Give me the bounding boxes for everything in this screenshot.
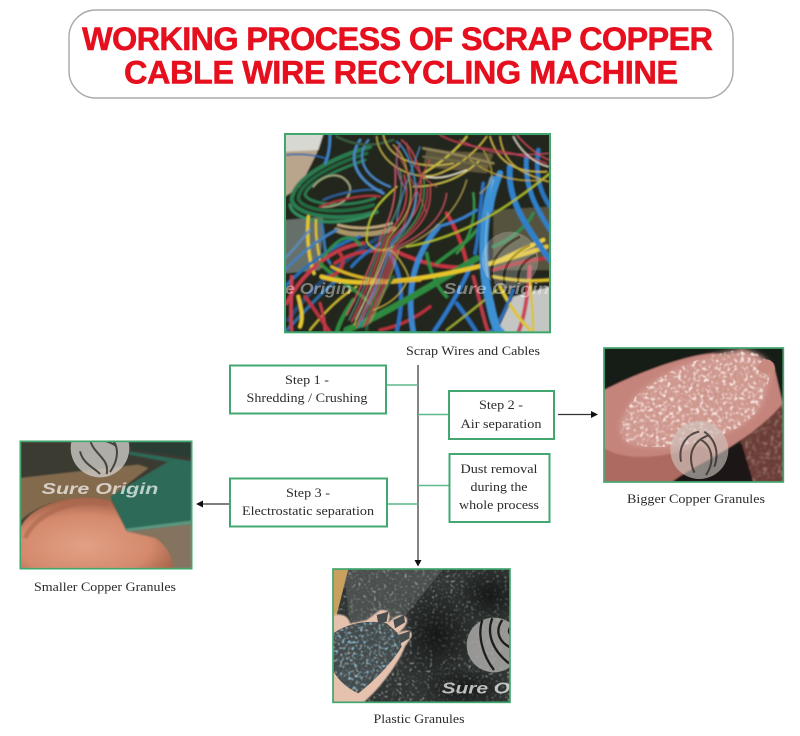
arrow: to smaller copper granules [196, 500, 229, 508]
step 3 box [230, 478, 387, 526]
watermark: logo on copper granules [670, 421, 728, 479]
watermark: logo on smaller granules [70, 442, 130, 478]
caption: scrap wires and cables: Scrap Wires and Cables [406, 343, 540, 358]
watermark: Sure Origin on smaller granules: Sure Origin [42, 481, 159, 498]
caption: smaller copper granules: Smaller Copper Granules [34, 579, 176, 594]
arrow: to bigger copper granules [558, 411, 598, 418]
photo: bigger copper granules [604, 348, 783, 482]
caption: plastic granules: Plastic Granules [374, 711, 464, 726]
step 2 box [449, 391, 554, 439]
watermark: logo on plastic granules [466, 618, 510, 672]
dust removal box: Dust removal [460, 461, 538, 476]
dust removal box: during the [470, 479, 528, 494]
photo: scrap wires and cables [285, 134, 550, 332]
watermark: Sure Origin on wires: Sure Origin [443, 281, 550, 298]
photo: smaller copper granules [20, 440, 192, 570]
step 2 box: Step 2 - [479, 397, 523, 412]
connector: dust removal [418, 484, 449, 486]
photo: plastic granules [332, 568, 511, 704]
dust removal box [450, 454, 550, 522]
caption: bigger copper granules: Bigger Copper Granules [627, 491, 765, 506]
connector: step 3 [387, 503, 418, 505]
dust removal box: whole process [459, 497, 539, 512]
watermark: Sure O on plastic granules: Sure O [442, 681, 510, 698]
flow spine with arrow [414, 365, 422, 566]
step 2 box: Air separation [460, 416, 542, 431]
connector: step 1 [386, 384, 418, 386]
step 3 box: Step 3 - [286, 485, 330, 500]
step 1 box: Step 1 - [285, 372, 329, 387]
title [69, 10, 733, 98]
title: CABLE WIRE RECYCLING MACHINE [124, 54, 678, 90]
title: WORKING PROCESS OF SCRAP COPPER [82, 21, 713, 57]
connector: step 2 [418, 414, 449, 416]
step 1 box: Shredding / Crushing [246, 390, 368, 405]
watermark: Sure Origin on wires: e Origin [285, 281, 352, 298]
step 1 box [230, 366, 386, 414]
watermark: Sure Origin on wires [286, 282, 548, 298]
watermark: logo on wires [482, 232, 538, 288]
step 3 box: Electrostatic separation [242, 503, 375, 518]
